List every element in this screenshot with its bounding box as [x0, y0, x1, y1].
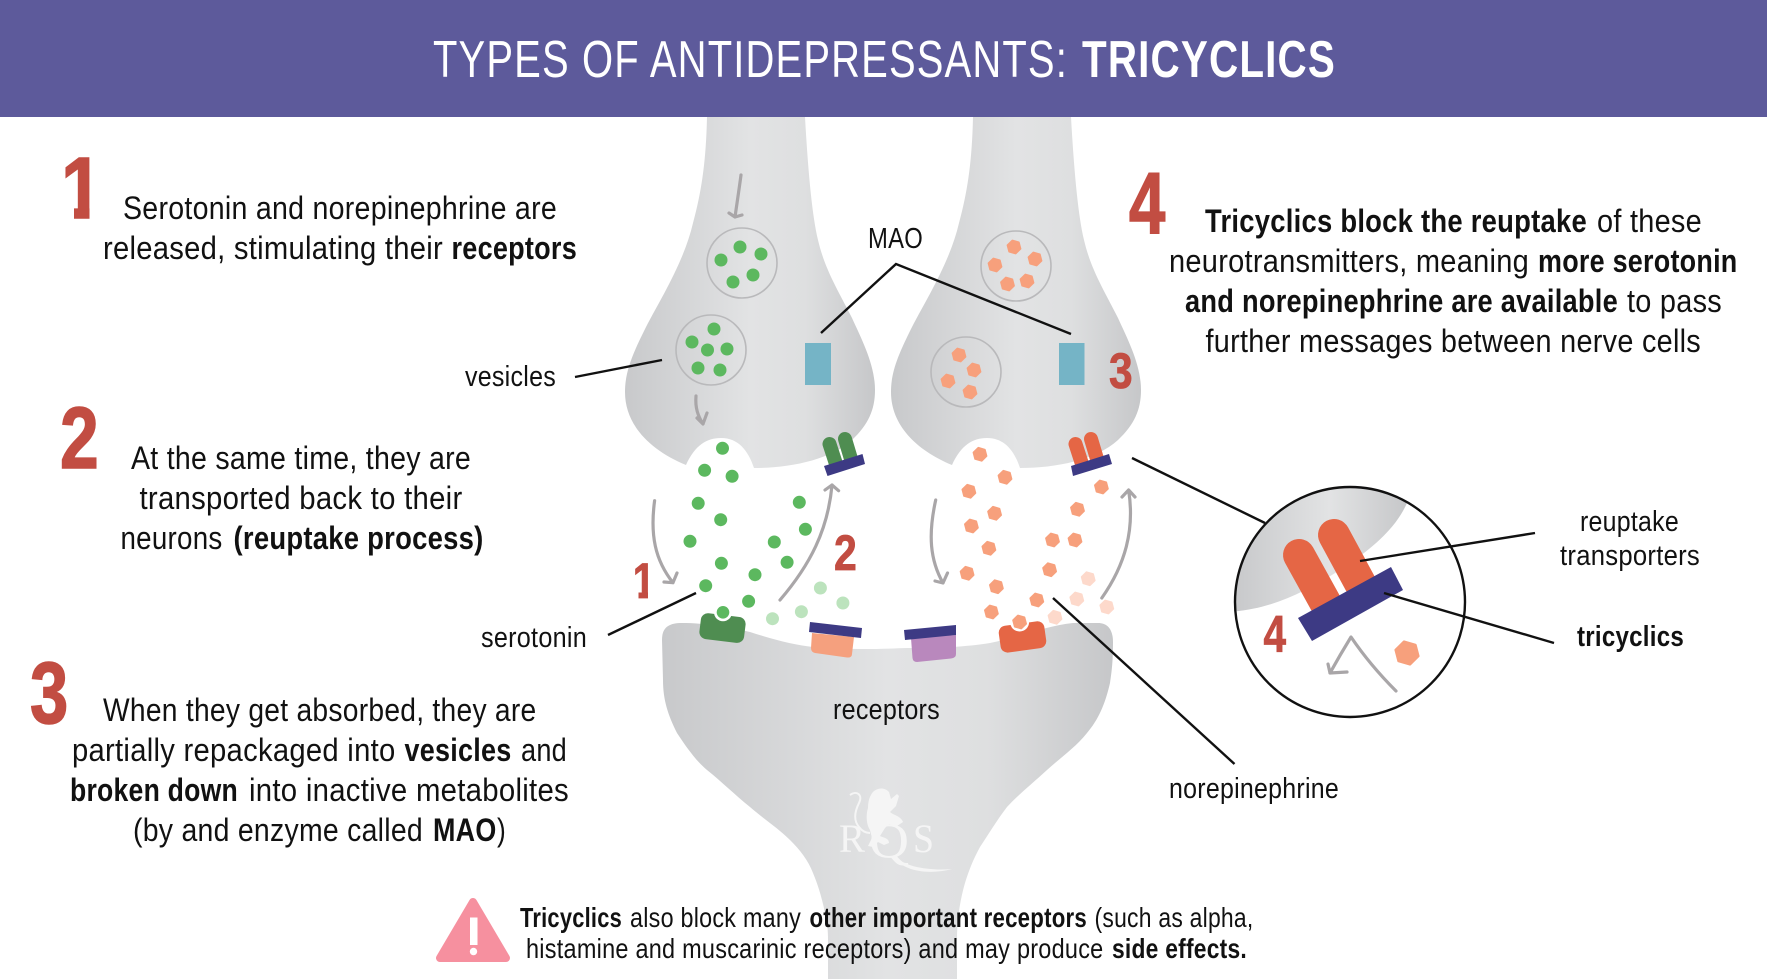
step 2 text: transported back to their	[140, 480, 463, 516]
step 3 text	[70, 692, 569, 848]
label numbers in diagram: 1	[633, 553, 655, 609]
step 4 text: and norepinephrine are available	[1185, 283, 1618, 319]
step 2 text: (reuptake process)	[234, 520, 484, 556]
number four zoomed: 4	[1264, 605, 1286, 663]
title: TYPES OF ANTIDEPRESSANTS:	[433, 31, 1068, 89]
step 1 text: Serotonin and norepinephrine are	[123, 190, 557, 226]
vesicle with norepinephrine bottom	[931, 337, 1001, 407]
labels: receptors	[833, 694, 940, 726]
step 4 text: Tricyclics block the reuptake	[1205, 203, 1587, 239]
neuron edge in zoom	[1236, 488, 1407, 612]
step 3 text: broken down	[70, 772, 238, 808]
MAO enzyme left	[805, 343, 831, 385]
warning text: histamine and muscarinic receptors) and may produce	[526, 933, 1104, 964]
vesicle with norepinephrine top	[981, 231, 1051, 301]
label numbers in diagram	[633, 343, 1133, 609]
labels: tricyclics	[1577, 621, 1684, 653]
labels: reuptake	[1580, 506, 1679, 538]
warning text: side effects.	[1112, 933, 1247, 964]
step 1 text	[103, 190, 577, 266]
labels: serotonin	[481, 622, 587, 654]
labels: vesicles	[465, 361, 556, 393]
arrows in synaptic cleft	[653, 485, 1135, 600]
label numbers in diagram: 3	[1109, 343, 1133, 399]
warning text: other important receptors	[810, 902, 1087, 933]
norepinephrine zoomed	[1396, 642, 1418, 664]
blocked receptor peach	[809, 622, 862, 658]
step 2 text: At the same time, they are	[131, 440, 471, 476]
warning text: (such as alpha,	[1094, 902, 1254, 933]
arrows inside presynaptic neuron	[696, 175, 742, 424]
step 4 text: further messages between nerve cells	[1206, 323, 1701, 359]
presynaptic neuron right	[891, 117, 1141, 468]
logo: S	[913, 816, 934, 861]
serotonin molecules in synapse	[684, 442, 812, 608]
norepinephrine receptor	[998, 612, 1047, 654]
step 4 text: of these	[1597, 203, 1702, 239]
header banner	[0, 0, 1767, 117]
postsynaptic neuron	[662, 623, 1113, 979]
step 1 text: receptors	[452, 230, 577, 266]
norepinephrine molecules in synapse	[960, 448, 1108, 619]
presynaptic neuron left	[625, 117, 875, 468]
blocked receptor purple	[904, 625, 956, 662]
step 3 text: partially repackaged into	[72, 732, 396, 768]
step 4 text: neurotransmitters, meaning	[1169, 243, 1529, 279]
logo lion	[850, 788, 903, 847]
arrow zoomed	[1328, 637, 1396, 691]
step 4 text: to pass	[1627, 283, 1722, 319]
labels	[465, 223, 1700, 805]
warning text	[520, 902, 1254, 964]
step 3 text: (by and enzyme called	[133, 812, 423, 848]
zoom circle	[1234, 486, 1466, 718]
reuptake transporter left	[824, 439, 865, 476]
step 1 number: 1	[61, 141, 103, 237]
step 3 text: into inactive metabolites	[249, 772, 569, 808]
step 2 number: 2	[60, 390, 99, 487]
step 3 text: MAO	[433, 812, 496, 848]
faded norepinephrine molecules	[1048, 572, 1113, 624]
labels: norepinephrine	[1169, 773, 1339, 805]
leader lines	[575, 264, 1265, 764]
vesicle with serotonin bottom	[676, 315, 746, 385]
serotonin receptor	[699, 603, 746, 644]
step 3 number: 3	[30, 644, 68, 742]
label numbers in diagram: 2	[834, 525, 857, 581]
step 3 text: and	[521, 732, 567, 768]
step 1 text: released, stimulating their	[103, 230, 443, 266]
logo: Q	[869, 812, 909, 868]
MAO enzyme right	[1059, 343, 1084, 385]
step 4 text	[1169, 203, 1738, 359]
step 3 text: )	[497, 812, 506, 848]
step 2 text	[120, 440, 484, 556]
logo letters: R	[839, 816, 865, 861]
leader lines to zoom labels	[1360, 533, 1554, 643]
step 3 text: vesicles	[404, 732, 512, 768]
warning icon	[440, 902, 506, 958]
labels: MAO	[868, 223, 923, 255]
warning text: also block many	[630, 902, 801, 933]
transporter capsules zoomed	[1299, 535, 1360, 602]
title: TRICYCLICS	[1082, 31, 1336, 89]
vesicle with serotonin top	[707, 228, 777, 298]
warning text: Tricyclics	[520, 902, 622, 933]
faded serotonin molecules	[766, 582, 849, 625]
reuptake transporter right	[1071, 439, 1112, 476]
step 2 text: neurons	[120, 520, 222, 556]
step 4 number: 4	[1129, 155, 1165, 252]
tricyclic drug bar zoomed	[1298, 567, 1403, 641]
labels: transporters	[1560, 540, 1700, 572]
step 3 text: When they get absorbed, they are	[103, 692, 536, 728]
logo	[839, 788, 952, 872]
